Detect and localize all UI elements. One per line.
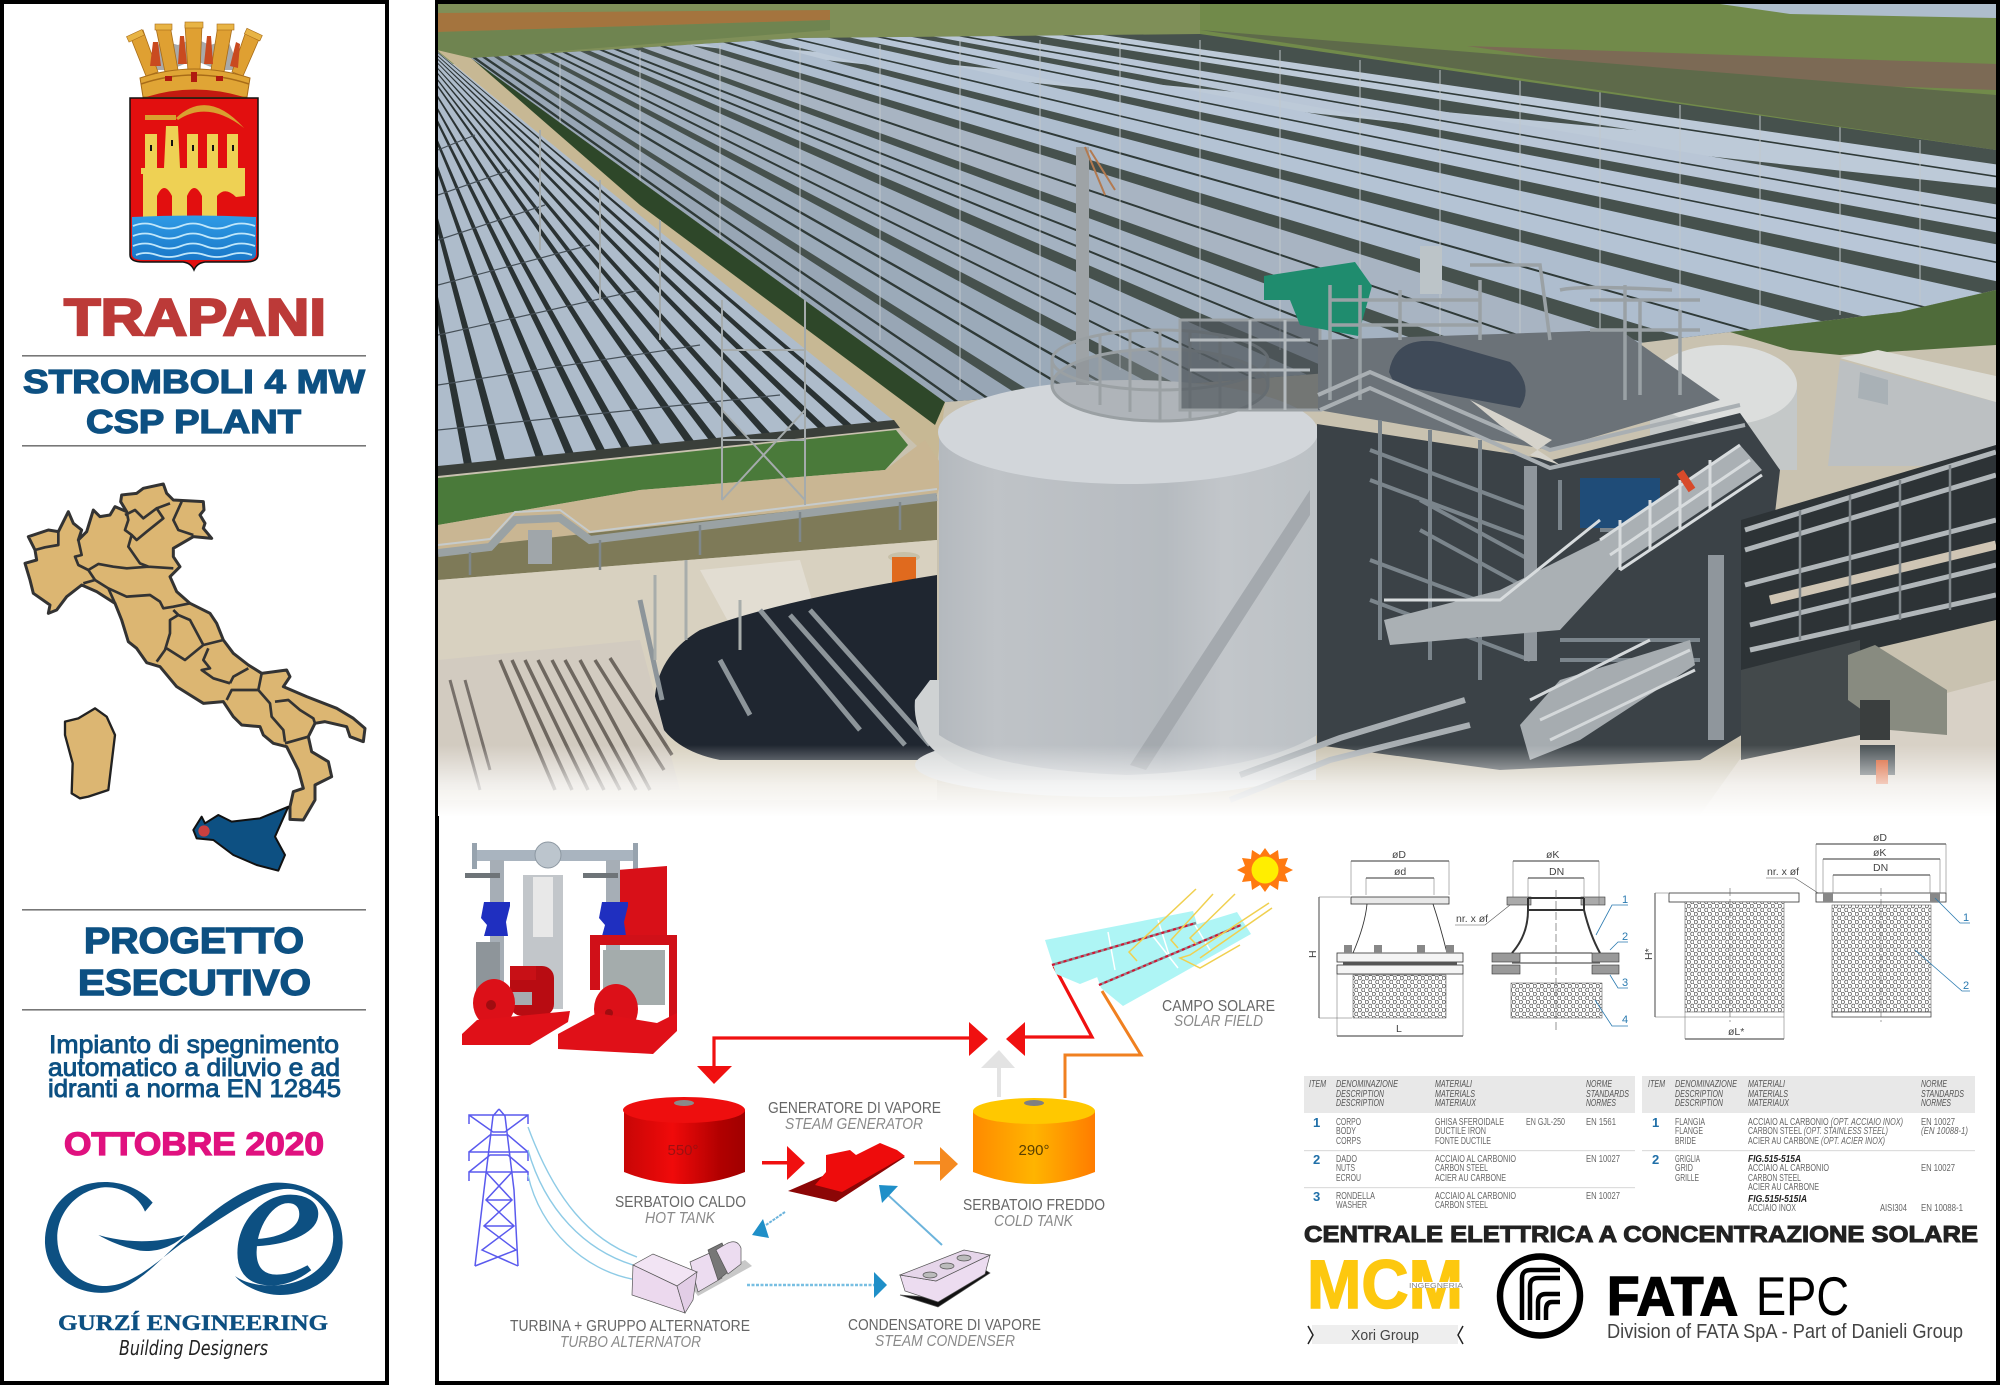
table: part list left: EN 10027 (1586, 1154, 1620, 1165)
strainer A exterior: H (1307, 950, 1319, 958)
strainer D section (1766, 832, 1970, 1022)
table: part list left: MATERIAUX (1435, 1098, 1476, 1109)
arrow: solar field to hot tank (697, 1022, 988, 1084)
stack pole (1076, 147, 1089, 385)
solar collectors (1045, 889, 1272, 1006)
arrow: generator to turbine (752, 1212, 785, 1238)
table: part list left: DENOMINAZIONE (1336, 1079, 1398, 1090)
red frame (590, 935, 677, 1030)
strainer C basket: øL* (1728, 1026, 1744, 1038)
table: part list left: EN GJL-250 (1526, 1117, 1565, 1128)
label: hot tank: HOT TANK (645, 1210, 716, 1227)
grass and road (438, 430, 945, 800)
table: part list right: FLANGE (1675, 1126, 1703, 1137)
label: cold tank: SERBATOIO FREDDO (963, 1197, 1105, 1214)
table: part list right: CARBON STEEL (OPT. STAINLESS STEEL) (1748, 1126, 1888, 1137)
excavated basin (640, 560, 937, 760)
table: part list right (1642, 1076, 1975, 1214)
green tarp (1264, 262, 1372, 336)
date: Ottobre 2020: OTTOBRE 2020 (64, 1126, 324, 1162)
heading: Stromboli plant (23, 363, 366, 440)
table: part list right: ACIER AU CARBONE (OPT. ACIER INOX) (1748, 1136, 1885, 1147)
map region: Sicily (193, 807, 288, 871)
table: part list right: FLANGIA (1675, 1117, 1705, 1128)
strainer D section: nr. x øf (1767, 866, 1799, 878)
steam generator (788, 1143, 905, 1202)
table: part list left: ITEM (1309, 1079, 1326, 1090)
strainer B section: øK (1546, 849, 1559, 861)
arrow: generator to cold tank (914, 1147, 958, 1181)
diagram: CSP cycle (469, 848, 1293, 1351)
table: part list right: ACCIAIO AL CARBONIO (1748, 1163, 1829, 1174)
logo: FATA symbol (1500, 1256, 1580, 1336)
table: part list left: CORPO (1336, 1117, 1361, 1128)
table: part list right: AISI304 (1880, 1203, 1907, 1214)
strainer D section: 1 (1963, 912, 1969, 924)
power lines (528, 1127, 637, 1279)
table: part list right: 2 (1652, 1152, 1659, 1167)
arrow: hot tank to generator (762, 1146, 805, 1180)
table: part list right: MATERIALS (1748, 1089, 1788, 1100)
table: part list right: CARBON STEEL (1748, 1173, 1801, 1184)
table: part list left: DESCRIPTION (1336, 1098, 1385, 1109)
solar field: front left block (438, 52, 893, 466)
table: part list left: DUCTILE IRON (1435, 1126, 1486, 1137)
strainer A exterior (1307, 849, 1463, 1036)
heading: Stromboli plant: STROMBOLI 4 MW (23, 363, 366, 400)
label: turbo alternator: TURBINA + GRUPPO ALTERNATORE (510, 1318, 750, 1335)
right grass strip (1730, 290, 1996, 355)
table: part list left: ECROU (1336, 1173, 1361, 1184)
table: part list left: MATERIALS (1435, 1089, 1475, 1100)
text block: system description: idranti a norma EN 12845 (48, 1075, 341, 1103)
text block: system description (48, 1031, 341, 1103)
label: steam generator: GENERATORE DI VAPORE (768, 1100, 941, 1117)
pipeline rack (438, 489, 937, 575)
table: part list right: GRILLE (1675, 1173, 1699, 1184)
diagram: fire pump units (462, 842, 677, 1054)
table: part list right: STANDARDS (1921, 1089, 1964, 1100)
text block: system description: Impianto di spegnimento (49, 1031, 339, 1059)
table: part list left: ACIER AU CARBONE (1435, 1173, 1506, 1184)
strainer D section: 2 (1963, 980, 1969, 992)
table: part list right: FIG.515I-515IA (1748, 1194, 1807, 1205)
table: part list right: FIG.515-515A (1748, 1154, 1801, 1165)
heading: Progetto esecutivo (78, 920, 311, 1003)
table: part list left: GHISA SFEROIDALE (1435, 1117, 1504, 1128)
main staircase (1384, 445, 1762, 645)
table: part list left: CARBON STEEL (1435, 1163, 1488, 1174)
label: steam condenser (848, 1317, 1041, 1350)
lower staircase (1520, 640, 1695, 760)
table: part list right: MATERIAUX (1748, 1098, 1789, 1109)
scaffold mast (540, 130, 805, 505)
table: part list left: EN 10027 (1586, 1191, 1620, 1202)
label: hot tank: SERBATOIO CALDO (615, 1194, 746, 1211)
hot tank: 550° (667, 1142, 699, 1159)
strainer B section (1455, 849, 1628, 1032)
right ground and container (1726, 640, 1996, 784)
technical drawings: strainers (1307, 832, 1970, 1039)
cold tank (973, 1098, 1095, 1184)
logo: Gurzi Engineering (45, 1118, 343, 1360)
table: part list right: NORME (1921, 1079, 1947, 1090)
pump header pipe (472, 842, 638, 869)
line: cold tank to solar field (1065, 991, 1141, 1098)
map region: Sardinia (65, 708, 115, 798)
table: part list left: WASHER (1336, 1200, 1367, 1211)
arrow: turbine to condenser (747, 1272, 887, 1298)
right pipe rack (1741, 445, 1996, 680)
label: solar field (1162, 998, 1275, 1030)
table: part list left: CARBON STEEL (1435, 1200, 1488, 1211)
label: cold tank (963, 1197, 1105, 1230)
table: part list left: NORMES (1586, 1098, 1616, 1109)
table: part list left: NUTS (1336, 1163, 1355, 1174)
fade to white (438, 745, 1996, 817)
strainer A exterior: ød (1394, 866, 1406, 878)
ground pipes (448, 657, 674, 791)
table: part list right: ACIER AU CARBONE (1748, 1182, 1819, 1193)
logo: MCM Ingegneria: INGEGNERIA (1409, 1281, 1463, 1290)
steam generator structure (1317, 265, 1780, 770)
table: part list left: STANDARDS (1586, 1089, 1629, 1100)
heading: Progetto esecutivo: ESECUTIVO (78, 962, 311, 1003)
logo name: GURZÍ ENGINEERING (58, 1310, 328, 1335)
transmission tower (469, 1109, 528, 1266)
logo: FATA EPC wordmark: Division of FATA SpA - Part of Danieli Group (1607, 1321, 1963, 1343)
panel: left sidebar (2, 2, 387, 1383)
label: steam condenser: STEAM CONDENSER (875, 1333, 1015, 1350)
logo: MCM Ingegneria: MCM (1307, 1246, 1463, 1323)
table: part list left: DADO (1336, 1154, 1357, 1165)
table: part list right: EN 10027 (1921, 1163, 1955, 1174)
table: part list left: CORPS (1336, 1136, 1361, 1147)
cold tank: 290° (1018, 1142, 1050, 1159)
service building (1828, 350, 1996, 466)
label: hot tank (615, 1194, 746, 1227)
table: part list right: BRIDE (1675, 1136, 1696, 1147)
orange cable drum (888, 552, 920, 584)
table: part list right: ACCIAIO AL CARBONIO (OPT. ACCIAIO INOX) (1748, 1117, 1903, 1128)
logo tagline: Building Designers (119, 1336, 268, 1360)
strainer A exterior: øD (1392, 849, 1406, 861)
label: turbo alternator (510, 1318, 750, 1351)
tank roof platform (1052, 320, 1320, 421)
table: part list right: GRIGLIA (1675, 1154, 1700, 1165)
strainer D section: DN (1873, 862, 1888, 874)
table: part list left: ACCIAIO AL CARBONIO (1435, 1154, 1516, 1165)
table: part list right: NORMES (1921, 1098, 1951, 1109)
table: part list right: MATERIALI (1748, 1079, 1785, 1090)
background fields (438, 4, 1996, 150)
heading: Stromboli plant: CSP PLANT (86, 403, 301, 440)
title: TRAPANI: TRAPANI (64, 289, 326, 347)
strainer B section: 2 (1622, 931, 1628, 943)
strainer B section: 4 (1622, 1014, 1628, 1026)
solar field: rear rows (471, 34, 1996, 402)
strainer B section: nr. x øf (1456, 913, 1488, 925)
table: part list left: 2 (1313, 1152, 1320, 1167)
table: part list left: MATERIALI (1435, 1079, 1472, 1090)
table: part list left: 1 (1313, 1115, 1320, 1130)
label: solar field: CAMPO SOLARE (1162, 998, 1275, 1015)
table: part list left: NORME (1586, 1079, 1612, 1090)
marker: Trapani (198, 825, 210, 837)
heading: Progetto esecutivo: PROGETTO (84, 920, 304, 961)
silo (1420, 246, 1442, 294)
table: part list left: 3 (1313, 1189, 1320, 1204)
label: steam generator: STEAM GENERATOR (785, 1116, 923, 1133)
strainer C basket: H* (1643, 948, 1655, 960)
strainer B section: 1 (1622, 894, 1628, 906)
table: part list left: FONTE DUCTILE (1435, 1136, 1491, 1147)
arrow: solar field return (1006, 966, 1092, 1056)
second storage tank (1649, 345, 1797, 470)
table: part list left (1304, 1076, 1635, 1211)
turbo alternator (632, 1242, 752, 1313)
table: part list left: BODY (1336, 1126, 1356, 1137)
icon: sun (1237, 848, 1293, 892)
strainer A exterior: L (1396, 1023, 1402, 1035)
table: part list left: DESCRIPTION (1336, 1089, 1385, 1100)
photo: CSP plant aerial view (438, 4, 1996, 816)
heading: Centrale elettrica: CENTRALE ELETTRICA A CONCENTRAZIONE SOLARE (1304, 1221, 1978, 1247)
table: part list left: RONDELLA (1336, 1191, 1375, 1202)
map: Italy with Sicily highlighted (25, 484, 365, 871)
table: part list left: ACCIAIO AL CARBONIO (1435, 1191, 1516, 1202)
table: part list right: ACCIAIO INOX (1748, 1203, 1796, 1214)
logo: FATA EPC wordmark: EPC (1756, 1265, 1849, 1327)
foreground pipes (1230, 700, 1470, 800)
strainer C basket (1643, 888, 1799, 1039)
strainer D section: øK (1873, 847, 1886, 859)
table: part list right: (EN 10088-1) (1921, 1126, 1968, 1137)
blue check valves (481, 902, 628, 936)
strainer D section: øD (1873, 832, 1887, 844)
table: part list right: 1 (1652, 1115, 1659, 1130)
concrete slab (700, 560, 815, 625)
label: solar field: SOLAR FIELD (1174, 1013, 1263, 1030)
text block: system description: automatico a diluvio e ad (48, 1054, 340, 1082)
table: part list right: DENOMINAZIONE (1675, 1079, 1737, 1090)
strainer B section: 3 (1622, 977, 1628, 989)
motor pump 1 (462, 966, 570, 1045)
logo: MCM Ingegneria: Xori Group (1351, 1327, 1419, 1344)
strainer B section: DN (1549, 866, 1564, 878)
icon: Trapani crown (126, 22, 262, 97)
motor pump 2 (558, 984, 677, 1054)
hot tank (623, 1097, 745, 1184)
table: part list right: DESCRIPTION (1675, 1089, 1724, 1100)
logo letter e: e (232, 1118, 322, 1324)
table: part list right: ITEM (1648, 1079, 1665, 1090)
table: part list right: DESCRIPTION (1675, 1098, 1724, 1109)
icon: Trapani shield (130, 98, 258, 270)
label: cold tank: COLD TANK (994, 1213, 1074, 1230)
label: steam generator (768, 1100, 941, 1133)
arrow: grey bypass (981, 1050, 1015, 1097)
label: steam condenser: CONDENSATORE DI VAPORE (848, 1317, 1041, 1334)
arrow: condenser to generator (879, 1185, 942, 1245)
table: part list right: EN 10088-1 (1921, 1203, 1963, 1214)
logo: FATA EPC wordmark (1607, 1265, 1963, 1343)
main thermal tank (915, 380, 1318, 797)
steam condenser (900, 1250, 990, 1307)
logo: FATA EPC wordmark: FATA (1607, 1265, 1738, 1327)
label: turbo alternator: TURBO ALTERNATOR (560, 1334, 701, 1351)
table: part list right: GRID (1675, 1163, 1693, 1174)
table: part list left: EN 1561 (1586, 1117, 1616, 1128)
table: part list right: EN 10027 (1921, 1117, 1955, 1128)
